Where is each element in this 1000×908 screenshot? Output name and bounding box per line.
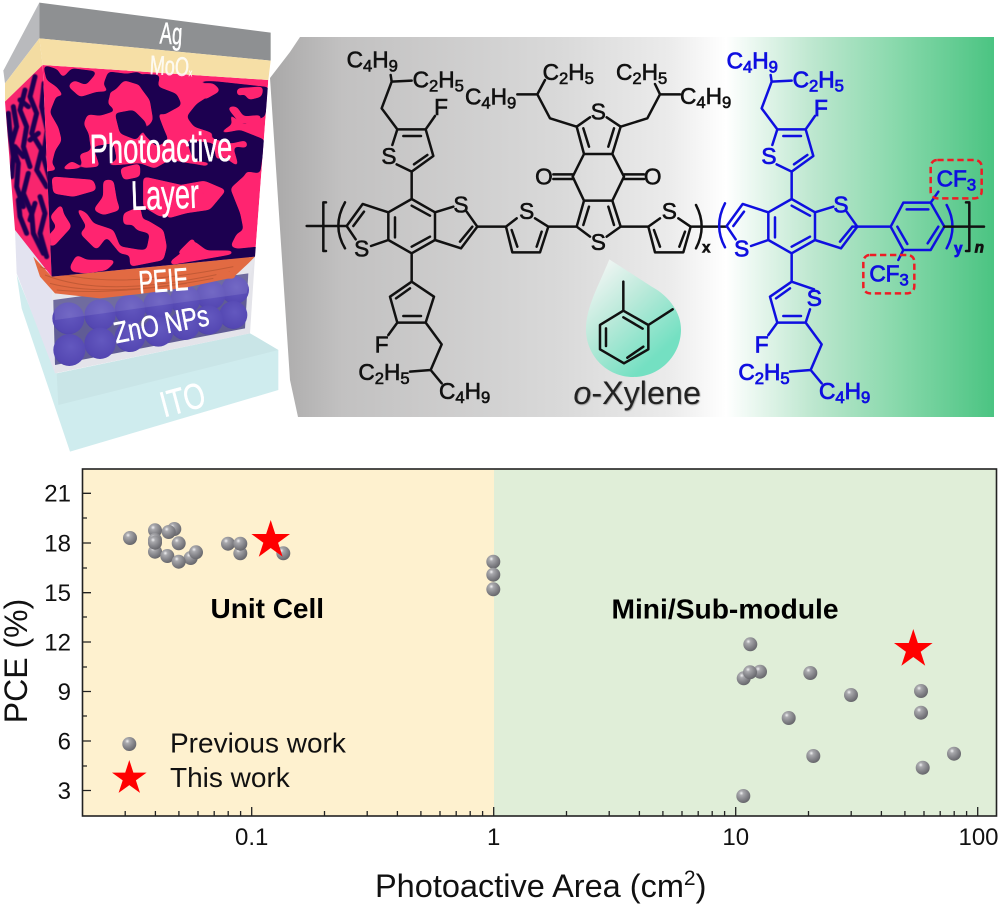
donor unit: blue: C bbox=[793, 66, 809, 92]
y axis tick labels: 21 bbox=[44, 480, 71, 508]
pink acceptor domains bbox=[43, 83, 263, 273]
donor unit: blue: 9 bbox=[769, 57, 778, 76]
acceptor unit: black: 2 bbox=[632, 69, 642, 88]
acceptor unit: black: 4 bbox=[481, 94, 491, 113]
y axis tick labels: 9 bbox=[58, 679, 71, 706]
donor unit: black: F bbox=[434, 94, 448, 120]
label: Photoactive: Photoactive bbox=[89, 124, 233, 173]
x axis title: Photoactive Area (cm bbox=[375, 868, 684, 904]
chart: PCE versus photoactive area bbox=[0, 469, 999, 904]
acceptor unit: black: 9 bbox=[507, 94, 516, 113]
donor unit: black: C bbox=[347, 47, 363, 73]
donor unit: blue: C bbox=[727, 47, 743, 73]
acceptor unit: black: 4 bbox=[696, 93, 706, 112]
CF3 phenyl unit: CF bbox=[937, 166, 967, 192]
donor unit: black: 5 bbox=[455, 76, 464, 95]
previous work data points bbox=[123, 522, 961, 803]
this work marker: module star bbox=[894, 629, 933, 666]
label: MoOx: MoOx bbox=[149, 49, 194, 82]
x axis tick labels: 1 bbox=[487, 824, 500, 851]
donor unit: black: H bbox=[438, 66, 455, 92]
o-Xylene solvent badge bbox=[573, 259, 701, 411]
legend bbox=[112, 728, 347, 793]
region: mini/sub-module background bbox=[494, 469, 997, 816]
acceptor unit: black: 9 bbox=[722, 93, 731, 112]
icon: solvent drop bbox=[586, 259, 681, 377]
CF3 phenyl unit: CF bbox=[869, 261, 900, 287]
atoms: S bbox=[354, 236, 369, 262]
acceptor unit: black: C bbox=[543, 59, 559, 85]
label: Unit Cell: Unit Cell bbox=[210, 593, 324, 624]
CF3 phenyl unit: 3 bbox=[967, 176, 976, 195]
device stack illustration bbox=[0, 3, 278, 452]
acceptor unit: black: C bbox=[616, 59, 632, 85]
donor unit: blue: H bbox=[752, 47, 769, 73]
y axis tick labels: 18 bbox=[44, 530, 71, 558]
atoms: S bbox=[519, 198, 534, 224]
layer: Ag electrode bbox=[3, 3, 271, 83]
donor unit: blue: H bbox=[845, 378, 861, 404]
acceptor unit: black: 2 bbox=[559, 69, 568, 88]
donor unit: black: H bbox=[465, 378, 481, 404]
donor unit: black: 4 bbox=[455, 388, 465, 407]
label: Layer: Layer bbox=[130, 171, 200, 219]
donor unit: blue: 9 bbox=[861, 388, 870, 407]
red dashed highlight boxes bbox=[863, 160, 982, 293]
label: Mini/Sub-module: Mini/Sub-module bbox=[612, 592, 839, 624]
acceptor unit: black: H bbox=[706, 83, 722, 109]
acceptor unit: black: S bbox=[591, 229, 606, 255]
icon: xylene ring bbox=[600, 282, 673, 363]
donor unit: blue: C bbox=[738, 359, 755, 385]
acceptor unit: black: x bbox=[702, 240, 711, 257]
donor unit: black: 2 bbox=[375, 369, 384, 388]
donor unit: blue: S bbox=[807, 285, 822, 311]
layer: PEIE strands bbox=[33, 257, 255, 298]
y axis tick labels: 3 bbox=[58, 778, 71, 805]
acceptor unit: black: 5 bbox=[585, 69, 594, 88]
layer: ZnO nanoparticles bbox=[52, 257, 255, 366]
donor unit: black: 2 bbox=[429, 76, 438, 95]
donor unit: blue: S bbox=[761, 143, 777, 169]
CF3 phenyl unit: 3 bbox=[900, 271, 909, 290]
legend: this work bbox=[112, 760, 291, 793]
label: ZnO NPs: ZnO NPs bbox=[111, 299, 212, 350]
x axis title: ) bbox=[696, 868, 706, 904]
donor unit: black: 9 bbox=[481, 388, 490, 407]
donor unit: black: C bbox=[439, 378, 455, 404]
acceptor unit: black: H bbox=[568, 59, 585, 85]
this work marker: unit cell star bbox=[251, 520, 290, 557]
acceptor unit: black bbox=[465, 59, 731, 257]
x axis tick labels bbox=[235, 824, 999, 851]
layer: photoactive side face bbox=[5, 65, 52, 276]
donor unit: blue: H bbox=[818, 66, 835, 92]
donor unit: black: H bbox=[372, 47, 389, 73]
layer: transparent encapsulation box bbox=[15, 230, 255, 373]
donor unit: blue: S bbox=[833, 192, 849, 218]
acceptor unit: black: C bbox=[680, 83, 696, 109]
donor unit: blue: 2 bbox=[755, 369, 764, 388]
legend: previous work: Previous work bbox=[170, 728, 347, 758]
acceptor unit: black: S bbox=[591, 98, 606, 124]
donor unit: black: C bbox=[358, 359, 375, 385]
donor unit: black: S bbox=[453, 192, 469, 218]
y axis tick labels: 15 bbox=[44, 580, 71, 607]
donor unit: black: 9 bbox=[389, 57, 398, 76]
x axis tick labels: 10 bbox=[722, 824, 749, 851]
donor unit: blue: F bbox=[755, 332, 769, 358]
donor unit: black: C bbox=[413, 66, 429, 92]
x axis tick labels: 100 bbox=[958, 824, 999, 851]
label: o-Xylene: o-Xylene bbox=[573, 375, 701, 411]
donor unit: black: F bbox=[375, 332, 389, 358]
label: Ag: Ag bbox=[159, 17, 183, 52]
layer: ITO substrate bbox=[17, 275, 278, 452]
acceptor unit: black: O bbox=[644, 164, 661, 190]
donor unit: blue: 5 bbox=[780, 369, 790, 388]
acceptor unit: black: 5 bbox=[658, 69, 667, 88]
donor unit: blue: 5 bbox=[835, 76, 844, 95]
acceptor unit: black: O bbox=[535, 164, 553, 190]
acceptor unit: black: S bbox=[662, 198, 677, 224]
acceptor unit: black: H bbox=[491, 84, 507, 110]
donor unit: blue: C bbox=[819, 378, 835, 404]
axes and ticks bbox=[82, 469, 996, 816]
y axis tick labels: 12 bbox=[44, 630, 71, 656]
donor unit: black: H bbox=[384, 359, 400, 385]
donor unit: blue bbox=[719, 47, 870, 407]
donor unit: blue: F bbox=[814, 95, 828, 121]
donor unit: blue: 2 bbox=[809, 76, 818, 95]
donor unit: blue: 4 bbox=[835, 388, 845, 407]
donor unit: black bbox=[307, 47, 490, 407]
panel: polymer structure background bbox=[270, 37, 994, 417]
CF3 phenyl unit: y bbox=[954, 240, 963, 257]
x axis title: 2 bbox=[684, 867, 696, 890]
atoms: S bbox=[734, 236, 749, 262]
CF3 phenyl unit bbox=[852, 160, 984, 293]
label: PEIE: PEIE bbox=[137, 261, 189, 300]
donor unit: black: S bbox=[381, 143, 397, 169]
acceptor unit: black: H bbox=[642, 59, 658, 85]
layer: MoOx bbox=[5, 38, 271, 102]
label: ITO: ITO bbox=[156, 374, 210, 425]
dark donor domains bbox=[43, 65, 269, 277]
donor unit: blue: H bbox=[764, 359, 780, 385]
CF3 phenyl unit: n bbox=[975, 240, 984, 257]
region: unit cell background bbox=[82, 469, 494, 816]
acceptor unit: black: C bbox=[465, 84, 481, 110]
layer: photoactive front face bbox=[43, 65, 269, 277]
legend: this work: This work bbox=[170, 762, 291, 793]
y axis tick labels bbox=[44, 480, 71, 805]
donor unit: black: 4 bbox=[363, 57, 372, 76]
y axis tick labels: 6 bbox=[58, 728, 71, 756]
donor unit: black: 5 bbox=[400, 369, 410, 388]
x axis tick labels: 0.1 bbox=[235, 824, 268, 851]
polymer structure bbox=[307, 47, 984, 411]
donor unit: blue: 4 bbox=[743, 57, 752, 76]
